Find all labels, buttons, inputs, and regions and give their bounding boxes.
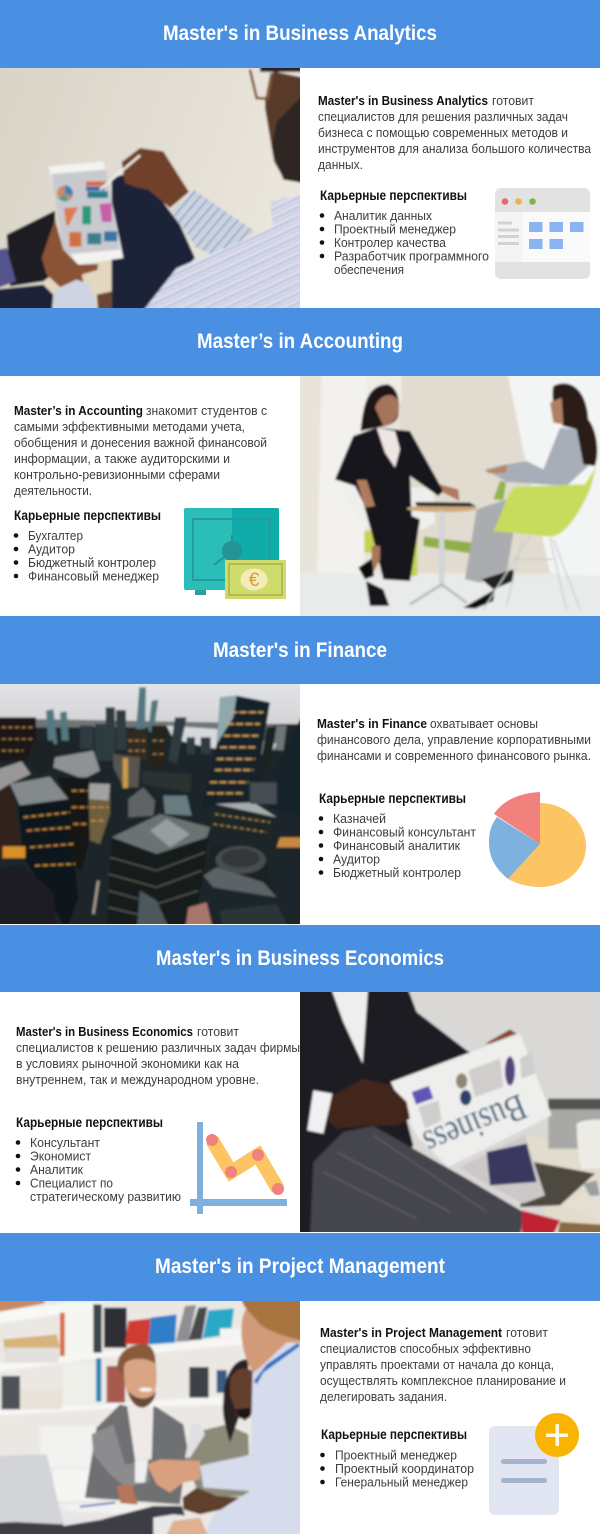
career list: Business Analytics	[320, 188, 489, 277]
career list: Project Management: Карьерные перспективы	[321, 1427, 467, 1442]
description: Accounting: обобщения и донесения важной финансовой	[14, 435, 267, 450]
heading: Business Analytics: Master's in Business Analytics	[163, 22, 437, 45]
icon: line chart	[190, 1122, 287, 1214]
career list: Accounting: Бухгалтер	[28, 528, 83, 543]
career list: Finance	[319, 791, 476, 880]
icon: browser window	[495, 188, 590, 279]
heading: Business Economics	[0, 925, 600, 992]
description: Finance: охватывает основы	[430, 716, 538, 731]
heading: Project Management	[0, 1233, 600, 1301]
heading: Finance: Master's in Finance	[213, 639, 387, 662]
description: Business Economics: специалистов к решению различных задач фирмы	[16, 1040, 300, 1055]
panel: Accounting	[0, 308, 600, 629]
career list: Finance: Аудитор	[333, 852, 380, 866]
heading: Project Management: Master's in Project Management	[155, 1255, 445, 1278]
career list: Business Analytics: Проектный менеджер	[334, 222, 456, 236]
heading: Business Analytics	[0, 0, 600, 68]
career list: Business Analytics: Контролер качества	[334, 235, 447, 250]
photo: aerial view of city skyscrapers	[0, 684, 300, 924]
description: Business Analytics: данных.	[318, 157, 363, 172]
panel: Business Analytics	[0, 0, 600, 321]
panel: Business Economics	[0, 925, 600, 1245]
icon: safe and euro banknote: €	[249, 570, 260, 591]
description: Business Economics: внутреннем, так и международном уровне.	[16, 1072, 259, 1087]
icon: document with plus badge	[489, 1413, 579, 1515]
career list: Business Economics: Аналитик	[30, 1162, 83, 1177]
career list: Finance: Бюджетный контролер	[333, 865, 461, 880]
photo: two businesswomen talking at table	[300, 376, 600, 616]
heading: Accounting: Master’s in Accounting	[197, 330, 403, 353]
description: Finance	[317, 716, 591, 763]
description: Accounting: информации, а также аудиторскими и	[14, 451, 230, 466]
photo: man reading Business newspaper: Business	[418, 1085, 532, 1163]
career list: Business Analytics: Карьерные перспективы	[320, 188, 467, 203]
photo: man holding tablet with charts	[0, 68, 300, 308]
description: Project Management: управлять проектами от начала до конца,	[320, 1357, 554, 1372]
career list: Business Analytics: Разработчик программного	[334, 248, 489, 264]
career list: Business Economics: Консультант	[30, 1135, 100, 1150]
description: Business Economics: Master's in Business Economics	[16, 1024, 193, 1039]
career list: Project Management	[320, 1427, 474, 1490]
career list: Project Management: Генеральный менеджер	[335, 1474, 468, 1490]
panel: Project Management	[0, 1233, 600, 1534]
career list: Accounting: Аудитор	[28, 542, 75, 556]
description: Project Management: Master's in Project Management	[320, 1325, 503, 1340]
description: Accounting: самыми эффективными методами учета,	[14, 419, 245, 434]
career list: Finance: Казначей	[333, 811, 386, 826]
career list: Finance: Финансовый консультант	[333, 824, 476, 840]
career list: Business Economics	[16, 1115, 181, 1204]
career list: Business Analytics: Аналитик данных	[334, 208, 432, 223]
description: Accounting: Master’s in Accounting	[14, 403, 143, 418]
description: Business Analytics: Master's in Business Analytics	[318, 93, 488, 108]
description: Business Economics	[16, 1024, 300, 1087]
description: Business Economics: в условиях рыночной экономики как на	[16, 1056, 240, 1071]
career list: Project Management: Проектный менеджер	[335, 1448, 457, 1462]
career list: Accounting: Бюджетный контролер	[28, 555, 156, 570]
description: Project Management	[320, 1325, 566, 1404]
career list: Business Analytics: обеспечения	[334, 262, 404, 277]
description: Business Economics: готовит	[197, 1024, 239, 1039]
career list: Accounting: Финансовый менеджер	[28, 568, 159, 584]
description: Project Management: готовит	[506, 1325, 548, 1340]
description: Business Analytics: готовит	[492, 93, 534, 108]
career list: Project Management: Проектный координатор	[335, 1461, 474, 1476]
description: Accounting	[14, 403, 267, 498]
panel: Finance	[0, 616, 600, 937]
description: Project Management: делегировать задания.	[320, 1389, 447, 1404]
description: Business Analytics	[318, 93, 592, 172]
heading: Finance	[0, 616, 600, 684]
description: Project Management: специалистов способных эффективно	[320, 1341, 531, 1356]
career list: Business Economics: Специалист по	[30, 1176, 113, 1190]
description: Finance: Master's in Finance	[317, 716, 427, 731]
heading: Business Economics: Master's in Business Economics	[156, 947, 444, 970]
career list: Finance: Карьерные перспективы	[319, 791, 466, 806]
description: Project Management: осуществлять комплексное планирование и	[320, 1373, 566, 1388]
photo: business handshake in office	[0, 1288, 313, 1534]
description: Business Analytics: бизнеса с помощью современных методов и	[318, 125, 568, 140]
photo: man reading Business newspaper	[300, 992, 600, 1232]
description: Accounting: контрольно-ревизионными сферами	[14, 467, 220, 482]
career list: Accounting: Карьерные перспективы	[14, 508, 161, 523]
description: Accounting: деятельности.	[14, 483, 92, 498]
icon: pie chart	[489, 792, 586, 887]
description: Business Analytics: специалистов для решения различных задач	[318, 109, 568, 124]
career list: Business Economics: стратегическому развитию	[30, 1189, 181, 1204]
heading: Accounting	[0, 308, 600, 376]
career list: Accounting	[14, 508, 161, 584]
description: Accounting: знакомит студентов с	[146, 403, 267, 418]
career list: Business Economics: Карьерные перспективы	[16, 1115, 163, 1130]
career list: Finance: Финансовый аналитик	[333, 838, 460, 853]
icon: safe and euro banknote	[184, 508, 286, 599]
career list: Business Economics: Экономист	[30, 1148, 91, 1164]
